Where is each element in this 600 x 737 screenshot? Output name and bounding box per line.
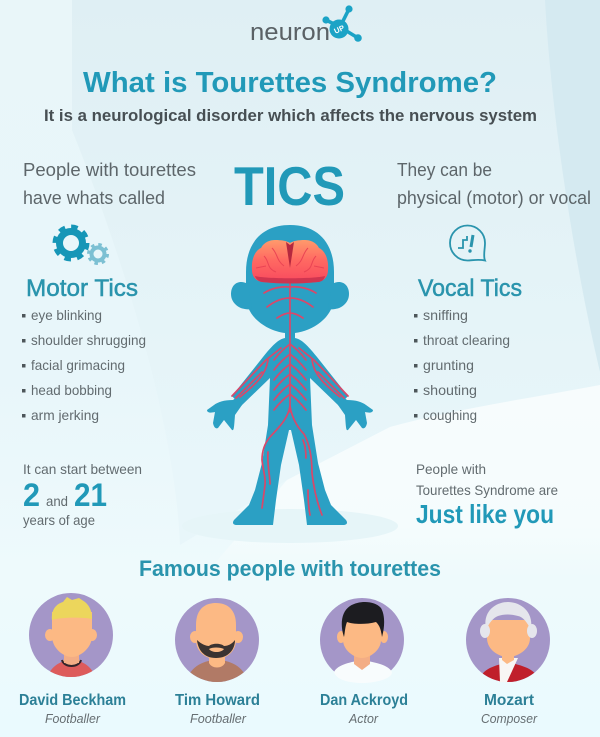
name: David Beckham bbox=[19, 692, 126, 709]
list: vocal tics bbox=[414, 307, 510, 423]
list: motor tics bbox=[22, 307, 146, 423]
person: Tim Howard bbox=[175, 598, 260, 726]
list: motor tics: arm jerking bbox=[31, 407, 99, 423]
list: motor tics: head bobbing bbox=[31, 382, 112, 398]
portrait: Dan Ackroyd bbox=[320, 598, 404, 683]
subtitle: It is a neurological disorder which affects the nervous system bbox=[44, 107, 537, 125]
role: Footballer bbox=[45, 711, 101, 726]
name: Mozart bbox=[484, 692, 535, 709]
callout: age range: 21 bbox=[74, 477, 107, 513]
logo: NeuronUP bbox=[250, 5, 362, 46]
callout: just like you: Tourettes Syndrome are bbox=[416, 482, 558, 498]
callout: age range: It can start between bbox=[23, 461, 142, 477]
logo wordmark: neuron bbox=[250, 19, 330, 46]
body silhouette bbox=[207, 225, 373, 525]
callout: age range: years of age bbox=[23, 512, 95, 528]
callout: age range: 2 bbox=[23, 477, 40, 513]
nerves bbox=[232, 284, 348, 515]
portrait: Mozart bbox=[466, 598, 550, 685]
heading: TICS: TICS bbox=[234, 155, 345, 217]
intro text right bbox=[397, 160, 591, 208]
intro text right: physical (motor) or vocal bbox=[397, 188, 591, 208]
person: Mozart bbox=[466, 598, 550, 726]
name: Tim Howard bbox=[175, 692, 260, 709]
title: What is Tourettes Syndrome? bbox=[83, 67, 497, 99]
person: Dan Ackroyd bbox=[320, 598, 408, 726]
heading: Motor Tics: Motor Tics bbox=[26, 275, 138, 302]
role: Actor bbox=[348, 711, 379, 726]
callout: just like you: People with bbox=[416, 461, 486, 477]
callout: age range bbox=[23, 461, 142, 528]
logo icon: neuron: UP bbox=[333, 23, 346, 36]
icon: gears bbox=[55, 227, 108, 264]
portrait: Tim Howard bbox=[175, 598, 259, 685]
list: vocal tics: grunting bbox=[423, 357, 474, 373]
person: David Beckham bbox=[19, 593, 126, 726]
list: vocal tics: coughing bbox=[423, 407, 477, 423]
portrait: David Beckham bbox=[29, 593, 113, 680]
intro text left: People with tourettes bbox=[23, 160, 196, 180]
list: vocal tics: throat clearing bbox=[423, 332, 510, 348]
intro text left bbox=[23, 160, 196, 208]
intro text left: have whats called bbox=[23, 188, 165, 208]
name: Dan Ackroyd bbox=[320, 692, 408, 709]
body figure with nervous system bbox=[207, 225, 373, 525]
list: motor tics: shoulder shrugging bbox=[31, 332, 146, 348]
list: motor tics: eye blinking bbox=[31, 307, 102, 323]
heading: famous people: Famous people with tourettes bbox=[139, 556, 441, 581]
list: motor tics: facial grimacing bbox=[31, 357, 125, 373]
icon: vocal speech bubble bbox=[450, 226, 485, 260]
role: Composer bbox=[481, 711, 538, 726]
role: Footballer bbox=[190, 711, 247, 726]
callout: just like you: Just like you bbox=[416, 499, 554, 529]
intro text right: They can be bbox=[397, 160, 492, 180]
heading: Vocal Tics: Vocal Tics bbox=[418, 275, 522, 302]
list: vocal tics: sniffing bbox=[423, 307, 468, 323]
brain bbox=[252, 240, 328, 284]
callout: just like you bbox=[416, 461, 558, 529]
list: vocal tics: shouting bbox=[423, 382, 477, 398]
callout: age range: and bbox=[46, 493, 68, 509]
